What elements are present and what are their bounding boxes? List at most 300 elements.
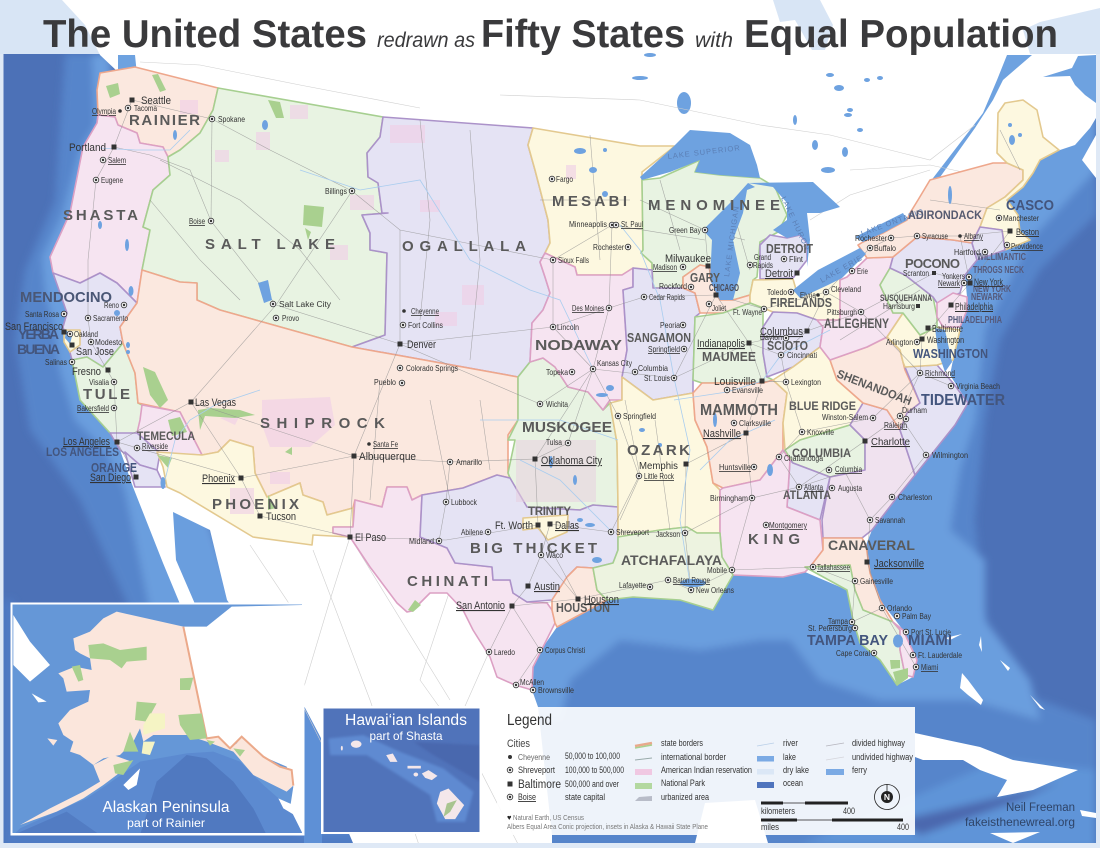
state: Nodaway [530,253,633,410]
city: Denver [398,339,436,351]
city: Salt Lake City: Salt Lake City [279,300,331,309]
legend: divided highway [826,738,905,748]
name: Atchafalaya: ATCHAFALAYA [621,552,722,568]
city: Sacramento: Sacramento [93,314,128,323]
legend: national park [635,778,705,789]
name: Allegheny: ALLEGHENY [824,316,889,331]
city: Denver: Denver [407,339,436,351]
city: St. Paul [613,220,643,229]
state: Rainier [97,67,218,157]
rivers [100,130,830,590]
state: Mendocino [53,273,137,367]
legend: ferry: ferry [852,765,867,775]
label: Lake Michigan: LAKE MICHIGAN [722,205,741,277]
city: Tampa: Tampa [828,617,848,626]
city: Colorado Springs: Colorado Springs [406,364,458,373]
roads in Canada and Mexico [140,62,1000,848]
legend: medium city [507,765,624,775]
Caribbean islands and Yucatan [695,135,1096,843]
legend heading: Cities: Cities [507,738,530,750]
legend: reservation [635,765,752,775]
legend: small city: 50,000 to 100,000 [565,751,620,761]
city: Gainesville: Gainesville [860,577,893,586]
city: New York: New York [974,277,1003,287]
city: Tulsa: Tulsa [546,438,562,447]
name: New York: NEW YORK [973,284,1012,295]
name: Detroit: DETROIT [766,242,813,256]
city: Lincoln [550,323,579,332]
name: Adirondack: ADIRONDACK [908,208,982,222]
city: Sioux Falls: Sioux Falls [558,256,589,265]
city: Grand Rapids [747,253,773,270]
city: San Antonio: San Antonio [456,600,505,612]
city: Jacksonville: Jacksonville [874,558,924,570]
city: Montgomery: Montgomery [769,521,807,530]
road network [88,100,1020,685]
city: Scranton: Scranton [903,269,929,278]
legend: ferry [826,765,867,775]
state: Salt Lake [142,88,388,347]
state: Detroit [760,235,807,279]
legend: medium city: 100,000 to 500,000 [565,765,624,775]
city: Seattle: Seattle [141,95,171,107]
city: Wichita: Wichita [546,400,568,409]
city: Springfield MO: Springfield [623,412,656,421]
bay: Pontchartrain [680,579,706,587]
city: Ft. Worth: Ft. Worth [495,520,533,532]
city: Riverside: Riverside [142,442,168,451]
city: Tacoma [125,104,157,113]
name: Newark: NEWARK [971,292,1004,303]
city: Birmingham: Birmingham [710,494,748,503]
credit: author: Neil Freeman [1006,802,1075,814]
city: Albuquerque: Albuquerque [359,451,416,463]
city: McAllen [513,678,544,688]
city: Wichita [537,400,568,409]
legend: river: river [783,738,798,748]
city: Syracuse [914,232,948,241]
Hudson Bay tip [773,0,833,50]
city: Baton Rouge [665,576,710,585]
name: Tule: TULE [83,386,130,403]
name: Muskogee: MUSKOGEE [522,419,612,436]
city: Spokane: Spokane [218,115,245,124]
state: Shenandoah [830,337,920,430]
city: Peoria: Peoria [660,321,680,330]
state: Washington [887,313,960,367]
legend: km scale: 400 [843,806,855,816]
lake labels [667,143,926,285]
legend: north arrow [874,784,900,810]
city: Modesto: Modesto [95,338,122,347]
city: Albany: Albany [964,232,983,241]
name: Nodaway: NODAWAY [535,337,622,354]
city: Grand Rapids: Grand [754,253,771,262]
name: Throgs Neck: THROGS NECK [973,265,1025,276]
city: Oakland: Oakland [74,330,98,339]
name: Tampa Bay: TAMPA BAY [807,632,888,649]
city: Winston-Salem: Winston-Salem [822,413,868,422]
bay: San Francisco [65,330,72,344]
city: Corpus Christi [537,646,585,655]
city: Clarksville: Clarksville [739,419,771,428]
legend: miles scale: miles [761,822,779,832]
city: Cedar Rapids: Cedar Rapids [649,293,685,302]
name: Yerba: YERBA [18,326,59,342]
state: Blue Ridge [773,347,863,450]
city: Oklahoma City: Oklahoma City [541,455,602,467]
inset caption: part of Shasta: part of Shasta [370,729,443,743]
name: Mendocino: MENDOCINO [20,289,112,306]
city: Kansas City: Kansas City [597,359,632,368]
legend: small city [508,751,620,762]
city: Salem [100,156,126,165]
name: Shenandoah: SHENANDOAH [835,367,914,408]
name: Chicago: CHICAGO [709,283,739,294]
city: Tucson: Tucson [266,511,296,523]
inset caption: Alaskan Peninsula: Alaskan Peninsula [102,799,230,816]
city: Cleveland: Cleveland [831,285,861,294]
city: Boston [1008,227,1039,238]
city: Atlanta [796,483,823,492]
name: Ozark: OZARK [627,442,690,459]
city: Little Rock: Little Rock [644,472,675,481]
city: Oakland [67,330,98,339]
city: Columbia SC: Columbia [835,465,862,474]
name: Columbia: COLUMBIA [792,448,851,460]
name: Big Thicket: BIG THICKET [470,540,597,557]
lake: Ontario [855,213,907,242]
city: Fargo [549,175,573,184]
city: Joliet: Joliet [712,304,727,313]
state: Tampa Bay [805,565,905,685]
state: Adirondack [858,163,1023,258]
name: Susquehanna: SUSQUEHANNA [880,293,932,304]
city: New Orleans: New Orleans [696,586,734,595]
name: Mammoth: MAMMOTH [700,402,778,419]
city: Cincinnati [778,351,817,360]
city: Chattanooga: Chattanooga [784,454,823,463]
city: Sacramento [85,314,128,323]
label: Lake Superior: LAKE SUPERIOR [667,143,741,161]
city: Evansville: Evansville [732,386,763,395]
city: Columbia SC [826,465,862,474]
inset caption: Hawaiian Islands: Hawai‘ian Islands [345,712,467,729]
name: Shasta: SHASTA [63,207,138,224]
city: Flint [781,255,804,264]
city: Lubbock: Lubbock [451,498,478,507]
credit [965,802,1075,829]
name: Sangamon: SANGAMON [627,331,691,345]
city: Palm Bay: Palm Bay [902,612,931,621]
name: Casco: CASCO [1006,197,1054,214]
states [50,67,1059,690]
city: Newark: Newark [938,279,961,288]
state: Scioto [763,312,823,377]
name: Ogallala: OGALLALA [402,238,526,255]
city: New York [968,277,1003,287]
city: Green Bay: Green Bay [669,226,701,235]
legend: ocean [757,778,803,788]
legend: km scale: kilometers [761,806,795,816]
legend: lake [757,752,796,762]
city: Mobile: Mobile [707,566,727,575]
legend: small city: Cheyenne [518,752,550,762]
city: Philadelphia: Philadelphia [955,302,993,313]
city: Dayton: Dayton [760,333,782,342]
city: Des Moines: Des Moines [572,304,604,313]
name: Willimantic: WILLIMANTIC [977,252,1026,263]
legend title: Legend [507,712,552,729]
state: Ozark [610,377,720,537]
title: with: with [695,29,733,52]
city: Chicago [714,292,718,298]
city: Richmond [917,369,955,378]
city: Savannah: Savannah [875,516,905,525]
city: Knoxville [799,428,834,437]
city: Kansas City [590,359,632,372]
city: Ft. Wayne: Ft. Wayne [733,308,762,317]
legend: sources: ♥ [507,813,512,822]
legend panel [497,707,915,835]
state: Susquehanna [880,268,937,335]
city: Charlotte: Charlotte [871,436,910,448]
legend: sources [507,813,708,831]
city: Providence [1004,242,1043,251]
city: Austin [526,581,560,593]
title band [43,13,1058,56]
pale water in title band [0,0,100,54]
city: Midland: Midland [409,537,434,546]
legend: lake: lake [783,752,796,762]
city: Hartford: Hartford [954,248,980,257]
city: San Jose [70,342,114,358]
state: Charlotte [822,403,915,538]
national parks [106,74,908,686]
state: Orange [125,452,165,487]
city: Baltimore: Baltimore [932,324,963,335]
city: Eugene: Eugene [101,176,123,185]
city: Providence: Providence [1011,242,1043,251]
city: Nashville: Nashville [703,428,741,440]
state: Willimantic [972,227,1005,260]
state: Yerba Buena [64,330,80,352]
name: Menominee: MENOMINEE [648,197,780,214]
legend: state capital: state capital [565,792,605,802]
name: Mesabi: MESABI [552,193,627,210]
city: Flint: Flint [789,255,804,264]
city: El Paso: El Paso [355,532,386,544]
city: Spokane [209,115,245,124]
lake: Great Salt Lake [258,280,272,303]
city: Milwaukee: Milwaukee [665,253,711,265]
title: redrawn as: redrawn as [377,29,475,52]
state: Allegheny [817,257,903,360]
city: Jackson: Jackson [656,530,680,539]
city: Columbus: Columbus [760,326,803,338]
state: Tule [72,343,142,437]
city: Philadelphia [948,302,993,313]
state: Trinity [523,515,568,540]
label: Lake Ontario: LAKE ONTARIO [860,207,926,238]
legend: sources: Albers Equal Area Conic projection, insets in Alaska & Hawaii State Plane [507,822,708,831]
legend: state borders: state borders [661,738,703,748]
city: Lexington: Lexington [791,378,821,387]
state: Gary [683,265,750,313]
city: Laredo [486,648,515,657]
lake: Okeechobee [893,634,903,648]
legend: miles scale [761,818,909,832]
city: Visalia: Visalia [89,378,109,387]
name: Houston: HOUSTON [556,601,610,615]
city: Pueblo: Pueblo [374,378,396,387]
city: Springfield IL: Springfield [648,345,680,354]
city: Cheyenne: Cheyenne [411,307,439,316]
gap between insets: ocean [304,712,322,843]
state: Houston [552,567,607,627]
city: Arlington: Arlington [886,338,913,347]
city: Rochester NY: Rochester [855,234,887,243]
Canadian water bodies [118,53,1096,182]
city: Indianapolis: Indianapolis [697,338,745,350]
name: Pocono: POCONO [905,256,960,271]
city: Columbia MO [632,364,668,375]
title: Fifty States: Fifty States [481,13,685,56]
state: Chinati [333,487,555,690]
city: San Diego: San Diego [90,472,131,484]
city: Atlanta: Atlanta [804,483,823,492]
city: El Paso [348,532,386,544]
state: Tidewater [900,365,968,475]
city: Knoxville: Knoxville [807,428,834,437]
city: Eugene [93,176,123,185]
city: Santa Fe [367,440,398,449]
inland lakes and bays [65,120,1022,648]
legend: medium city: Shreveport [518,765,555,775]
city: Orlando: Orlando [887,604,912,613]
credit: website: fakeisthenewreal.org [965,815,1075,829]
legend: national park: National Park [661,778,705,788]
city: Albany [958,232,983,241]
city: Durham [897,406,927,419]
city: Virginia Beach: Virginia Beach [956,382,1000,391]
city: Yonkers: Yonkers [942,272,965,281]
legend: international border [635,752,726,762]
legend: miles scale: 400 [897,822,909,832]
state: Phoenix [157,440,353,545]
state: Pocono [890,237,977,303]
city: Waco [538,551,563,560]
city: San Jose: San Jose [76,346,114,358]
state: Maumee [693,303,773,383]
city: Brownsville: Brownsville [538,686,574,695]
city: Boston: Boston [1016,227,1039,238]
name: Firelands: FIRELANDS [770,296,832,310]
state: Muskogee [508,358,618,510]
name: Philadelphia: PHILADELPHIA [948,315,1002,326]
state: Shasta [50,115,170,303]
city: St. Petersburg: St. Petersburg [808,624,852,633]
city: Detroit: Detroit [765,268,793,280]
city: Raleigh: Raleigh [884,421,907,430]
state: Firelands [750,277,840,320]
legend: state capital [507,792,605,802]
city: Lincoln: Lincoln [557,323,579,332]
legend: reservation: American Indian reservation [661,765,752,775]
city: Abilene: Abilene [461,528,483,537]
city: Shreveport: Shreveport [616,528,650,537]
city: Washington [920,335,964,345]
city: Olympia: Olympia [92,107,116,116]
city: Little Rock [636,472,675,481]
name: Trinity: TRINITY [528,506,571,518]
name: Temecula: TEMECULA [137,429,195,443]
city: Memphis: Memphis [639,461,678,472]
city: Baltimore [926,324,963,335]
city: Provo: Provo [282,314,299,323]
city: Bakersfield: Bakersfield [77,404,109,413]
legend: state capital: Boise [518,792,536,802]
city: Tacoma: Tacoma [134,104,157,113]
legend: large city: Baltimore [518,779,561,791]
city: Laredo: Laredo [494,648,515,657]
city: Fort Collins: Fort Collins [408,321,443,330]
city: Augusta: Augusta [838,484,862,493]
name: Salt Lake: SALT LAKE [205,236,335,253]
city: Riverside [134,442,168,451]
legend: urbanized area [635,792,709,802]
city: Charleston: Charleston [898,493,932,502]
name: Atlanta: ATLANTA [783,490,831,502]
city: Santa Fe: Santa Fe [373,440,398,449]
city: Cincinnati: Cincinnati [787,351,817,360]
legend: river [757,738,798,748]
city: Fargo: Fargo [556,175,573,184]
legend: urbanized area: urbanized area [661,792,709,802]
pale water north of Canada [1023,8,1100,54]
label: Lake Huron: LAKE HURON [779,195,812,252]
city: Erie [849,267,868,276]
city: Billings: Billings [325,187,347,196]
title: Equal Population: Equal Population [744,13,1058,56]
legend: divided highway: divided highway [852,738,905,748]
city: Provo [273,314,299,323]
name: Chinati: CHINATI [407,573,488,590]
city: Pittsburgh: Pittsburgh [827,308,857,317]
legend: large city [508,779,619,791]
city: Fresno: Fresno [72,366,101,378]
city: Cape Coral: Cape Coral [836,649,870,658]
city: Reno: Reno [104,301,119,310]
legend: undivided highway [826,752,913,762]
city: San Francisco: San Francisco [5,321,63,333]
state: Columbia [785,425,865,477]
city: Phoenix: Phoenix [202,473,235,485]
lake: Huron [748,182,840,267]
legend: dry lake: dry lake [783,765,809,775]
state: Los Angeles [110,433,160,470]
region names [17,112,1054,649]
city: Wilmington: Wilmington [932,451,968,460]
name: Blue Ridge: BLUE RIDGE [789,401,856,413]
city: Augusta [829,484,862,493]
name: Maumee: MAUMEE [702,350,756,364]
city: Erie: Erie [857,267,868,276]
label: Lake Erie: LAKE ERIE [818,253,864,285]
legend: km scale [761,802,855,816]
legend: large city: 500,000 and over [565,779,619,789]
city: Lafayette: Lafayette [619,581,646,590]
